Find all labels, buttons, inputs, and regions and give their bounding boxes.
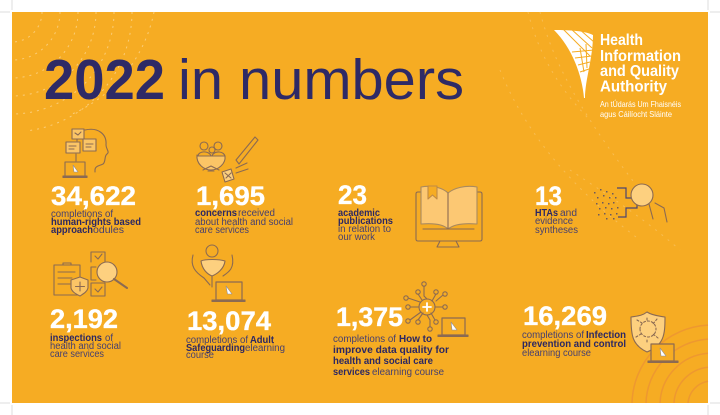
icon: person in hands with laptop bbox=[192, 245, 245, 302]
stat: 1,695 bbox=[195, 181, 293, 236]
stat: 1,695: 1,695 bbox=[196, 181, 265, 211]
stat: 2,192: of bbox=[105, 333, 113, 344]
icon: medical network and laptop bbox=[404, 282, 468, 336]
stat: 2,192: 2,192 bbox=[50, 304, 118, 334]
stat: 16,269: completions of bbox=[522, 330, 584, 341]
logo text: Health bbox=[600, 32, 643, 49]
stat: 2,192 bbox=[50, 304, 121, 360]
stat: 1,695: about health and social bbox=[195, 217, 293, 228]
stat: 23: 23 bbox=[338, 180, 367, 210]
stat: 16,269: Infection bbox=[586, 330, 626, 341]
logo text bbox=[600, 32, 681, 96]
logo: HIQA bbox=[554, 28, 681, 119]
logo swoosh bbox=[554, 28, 595, 98]
stat: 34,622 bbox=[51, 181, 141, 236]
logo text: Authority bbox=[600, 78, 667, 96]
stat: 16,269: 16,269 bbox=[523, 301, 607, 331]
stat: 16,269: elearning course bbox=[522, 348, 591, 359]
stat: 34,622: human-rights based bbox=[51, 217, 141, 228]
stat: 34,622: odules bbox=[93, 225, 124, 236]
stat: 13,074: 13,074 bbox=[187, 306, 271, 336]
stat: 13: and bbox=[560, 208, 577, 219]
logo text: and Quality bbox=[600, 63, 679, 80]
logo Irish text: agus Cáilíocht Sláinte bbox=[600, 109, 672, 119]
stat: 23: academic bbox=[338, 208, 380, 219]
stat: 23: publications bbox=[338, 216, 393, 227]
stat: 13: evidence bbox=[535, 216, 573, 227]
stat: 13,074: course bbox=[186, 350, 214, 361]
stat: 2,192: inspections bbox=[50, 333, 102, 344]
stat: 1,375: 1,375 bbox=[336, 302, 403, 332]
stat: 34,622: 34,622 bbox=[51, 181, 136, 211]
stat: 1,375: elearning course bbox=[372, 367, 444, 378]
stat: 13,074 bbox=[186, 306, 285, 361]
stat: 1,375: How to bbox=[399, 334, 432, 345]
logo Irish text: An tÚdarás Um Fhaisnéis bbox=[600, 99, 681, 109]
stat: 1,375: improve data quality for bbox=[333, 345, 449, 356]
stat: 1,695: received bbox=[238, 208, 275, 219]
stat: 13: syntheses bbox=[535, 225, 578, 236]
icon: clipboard, checklist and magnifier bbox=[54, 252, 127, 296]
stat: 16,269 bbox=[522, 301, 626, 359]
stat: 1,375: completions of bbox=[333, 334, 396, 345]
icon: head with speech bubbles and laptop bbox=[63, 129, 108, 178]
stat: 13 bbox=[535, 181, 578, 236]
stat: 1,695: concerns bbox=[195, 208, 237, 219]
stat: 1,375: services bbox=[333, 367, 370, 378]
stat: 23: in relation to bbox=[338, 224, 391, 235]
title remainder: in numbers bbox=[178, 48, 464, 111]
stat: 2,192: health and social bbox=[50, 341, 121, 352]
icon: virus shield and laptop bbox=[631, 312, 678, 362]
stat: 13,074: Safeguarding bbox=[186, 343, 245, 354]
stat: 13: HTAs bbox=[535, 208, 558, 219]
logo Irish text bbox=[600, 99, 681, 119]
title: 2022 bbox=[44, 48, 165, 111]
stat: 1,375: health and social care bbox=[333, 356, 433, 367]
stat: 2,192: care services bbox=[50, 349, 104, 360]
logo text: Information bbox=[600, 48, 681, 65]
stat: 23: our work bbox=[338, 232, 376, 243]
stat: 34,622: completions of bbox=[51, 209, 113, 220]
stat: 1,695: care services bbox=[195, 225, 249, 236]
icon: open book on monitor bbox=[416, 186, 482, 247]
stat: 34,622: approach bbox=[51, 225, 93, 236]
stat: 1,375 bbox=[333, 302, 449, 378]
icon: dissolving medical cross and magnifier bbox=[594, 184, 667, 222]
stat: 13,074: completions of bbox=[186, 335, 248, 346]
stat: 23 bbox=[338, 180, 393, 243]
stat: 13: 13 bbox=[535, 181, 562, 211]
stat: 13,074: Adult bbox=[250, 335, 275, 346]
icon: people in hands and ballot with pen bbox=[197, 137, 258, 182]
stat: 16,269: prevention and control bbox=[522, 339, 626, 350]
stat: 13,074: elearning bbox=[245, 343, 285, 354]
